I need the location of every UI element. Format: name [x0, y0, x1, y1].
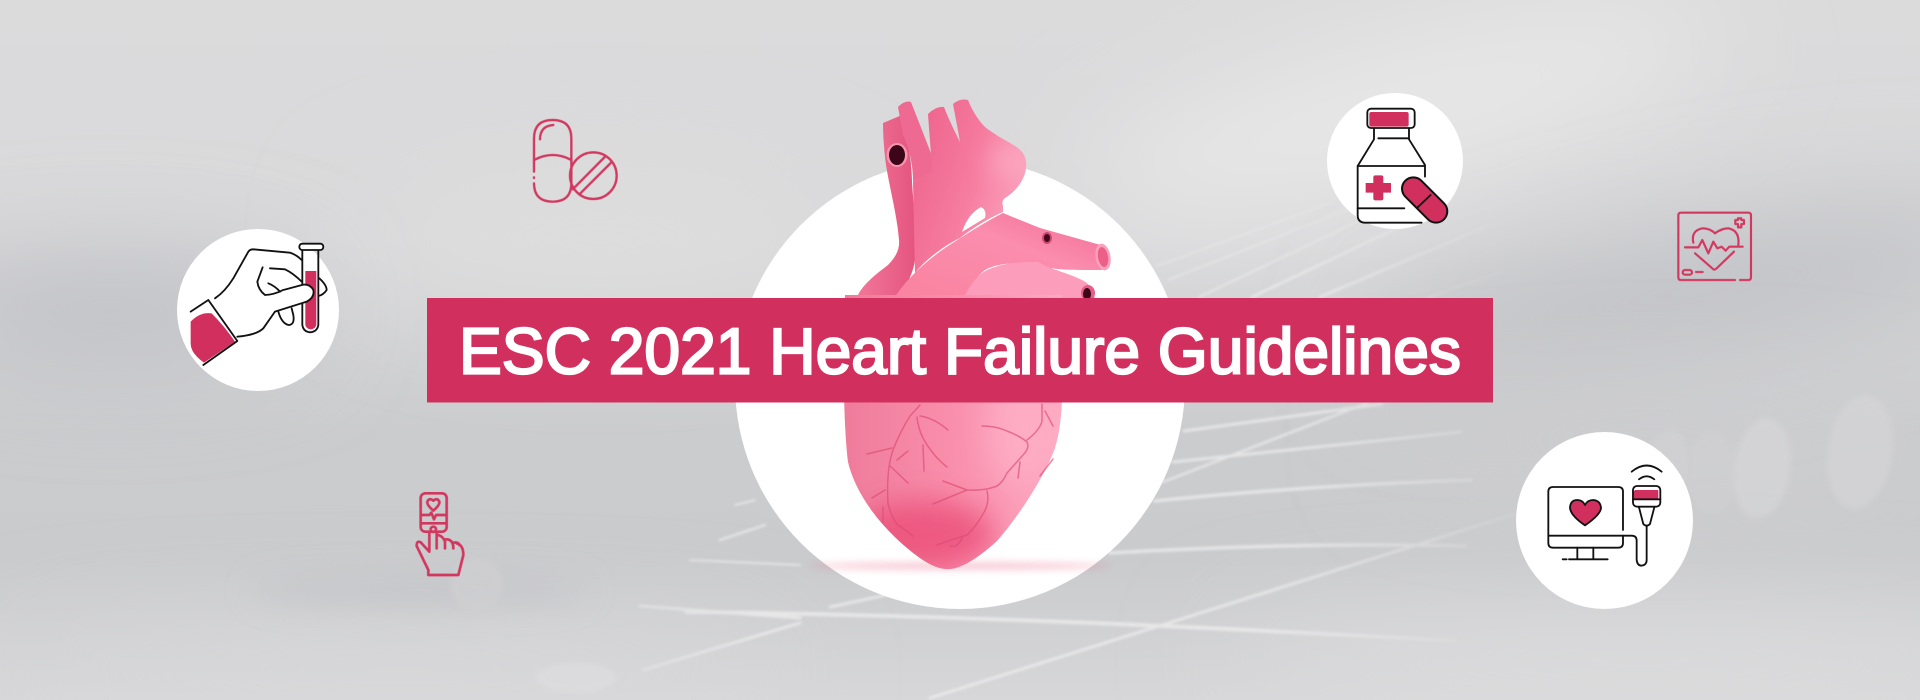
pulmonary artery [893, 213, 1110, 300]
left vessel and atrium [850, 115, 915, 305]
icon: hand holding test tube [177, 229, 339, 391]
ventricle [844, 295, 1063, 569]
pulmonary vessel opening [1093, 242, 1113, 272]
banner title text: ESC 2021 Heart Failure Guidelines [459, 314, 1461, 388]
coronary veins [867, 404, 1053, 546]
title banner [427, 298, 1493, 402]
icon: heart ecg card [1678, 213, 1751, 280]
icon: capsule and tablet [534, 120, 617, 202]
icon: medicine bottle and capsule [1327, 93, 1463, 229]
main white circle [735, 159, 1185, 609]
aorta [913, 100, 1026, 273]
aorta highlight [990, 144, 1030, 176]
white gap [962, 207, 986, 232]
dark vessel openings [886, 143, 908, 167]
heart shadow [810, 563, 1110, 569]
ventricle shading [866, 402, 1043, 570]
background light streaks [640, 258, 1458, 699]
icon: finger pulse oximeter [417, 493, 463, 575]
small vessel [898, 102, 933, 182]
left atrium [963, 261, 1095, 300]
heart illustration [844, 100, 1113, 570]
icon: ultrasound monitor and probe [1516, 432, 1693, 609]
